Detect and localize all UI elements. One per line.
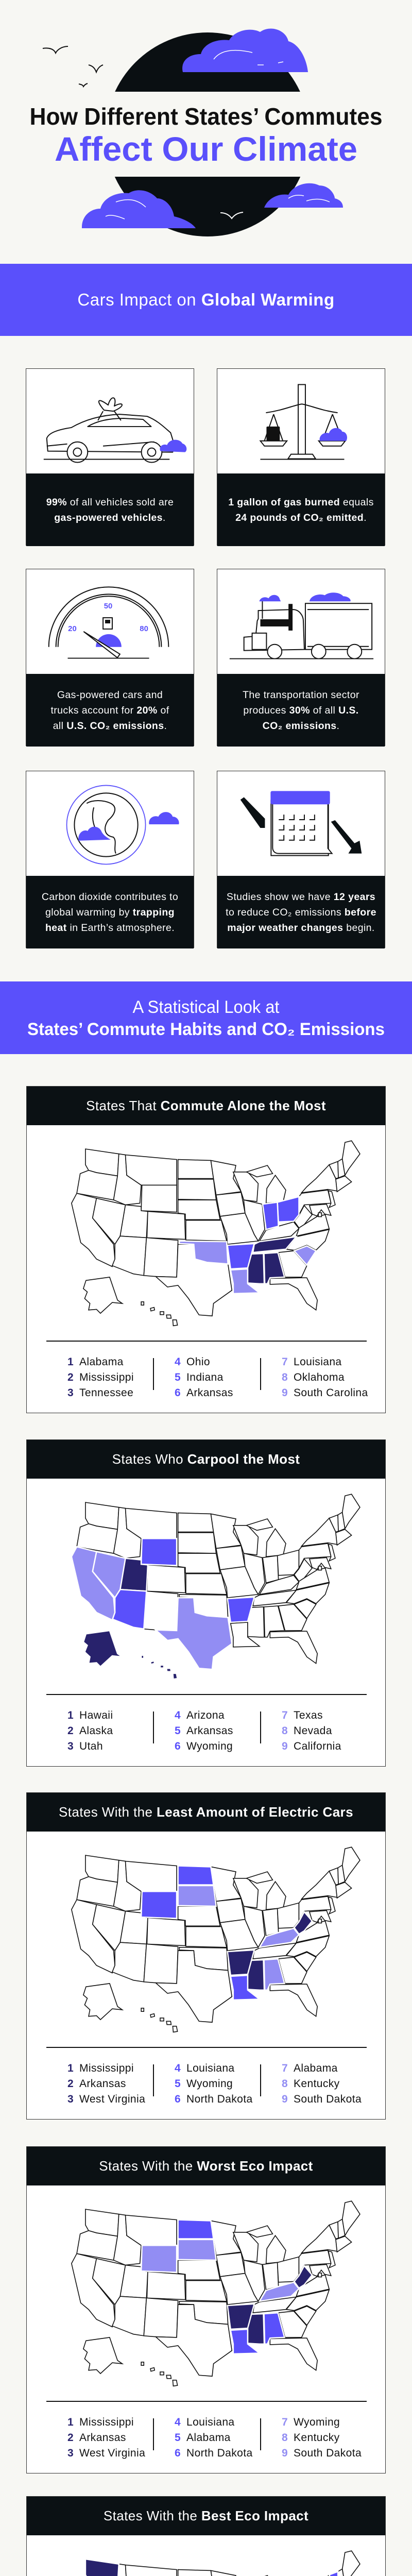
legend: Arkansas — [79, 2078, 126, 2090]
title: How Different States’ Commutes — [30, 103, 382, 130]
legend: South Carolina — [294, 1387, 368, 1399]
panel header — [27, 1087, 385, 1125]
banner: cars impact: Cars Impact on Global Warming — [77, 290, 335, 309]
legend: 7 — [282, 1709, 288, 1721]
legend: Arkansas — [186, 1387, 233, 1399]
legend: 2 — [67, 2078, 74, 2090]
card: carbon dioxide — [26, 771, 194, 948]
card: 1 gallon — [217, 368, 385, 546]
legend: 4 — [175, 2062, 181, 2074]
legend: Nevada — [294, 1725, 332, 1737]
legend: Oklahoma — [294, 1371, 345, 1383]
legend: 4 — [175, 2416, 181, 2428]
legend: West Virginia — [79, 2093, 145, 2105]
text: The transportation sector — [243, 689, 359, 701]
text: produces 30% of all U.S. — [243, 705, 359, 716]
text: Gas-powered cars and — [57, 689, 163, 701]
legend: 8 — [282, 2078, 288, 2090]
legend: South Dakota — [294, 2447, 362, 2459]
legend: North Dakota — [186, 2093, 253, 2105]
map — [71, 1846, 360, 2033]
legend: North Dakota — [186, 2447, 253, 2459]
text — [217, 674, 385, 747]
legend: Hawaii — [79, 1709, 113, 1721]
icon: speedometer — [48, 586, 169, 658]
legend: 8 — [282, 1725, 288, 1737]
legend: 3 — [67, 2447, 74, 2459]
legend: Wyoming — [294, 2416, 340, 2428]
legend: South Dakota — [294, 2093, 362, 2105]
legend: 9 — [282, 2093, 288, 2105]
legend: 8 — [282, 2432, 288, 2444]
legend — [67, 2416, 362, 2459]
legend: 9 — [282, 1740, 288, 1752]
panel: best eco — [26, 2496, 386, 2576]
legend: 4 — [175, 1709, 181, 1721]
text — [217, 473, 385, 546]
legend: 7 — [282, 1356, 288, 1368]
text: 1 gallon of gas burned equals — [228, 497, 374, 508]
legend: 1 — [67, 1709, 74, 1721]
legend: Mississippi — [79, 2062, 134, 2074]
map — [72, 1494, 360, 1679]
map — [71, 2200, 360, 2386]
legend: Louisiana — [186, 2062, 235, 2074]
legend: Wyoming — [186, 2078, 233, 2090]
legend: Ohio — [186, 1356, 210, 1368]
text: Carbon dioxide contributes to — [42, 891, 178, 903]
legend: Louisiana — [294, 1356, 342, 1368]
panel: carpool — [26, 1439, 386, 1767]
legend: Kentucky — [294, 2078, 340, 2090]
text: 99% of all vehicles sold are — [46, 497, 174, 508]
legend: 6 — [175, 1387, 181, 1399]
legend: Kentucky — [294, 2432, 340, 2444]
card: 99% vehicles — [26, 368, 194, 546]
text: global warming by trapping — [45, 907, 175, 918]
banner: statistical look: States’ Commute Habits and CO₂ Emissions — [27, 1020, 385, 1039]
panel header: States With the Least Amount of Electric Cars — [59, 1804, 353, 1820]
panel: commute alone — [26, 1086, 386, 1413]
legend: Alaska — [79, 1725, 113, 1737]
banner: cars impact — [0, 264, 412, 336]
header illustration — [30, 29, 382, 236]
text: Studies show we have 12 years — [227, 891, 375, 903]
legend: 6 — [175, 2093, 181, 2105]
legend: 3 — [67, 1387, 74, 1399]
panel: least electric — [26, 1792, 386, 2120]
legend: Alabama — [186, 2432, 231, 2444]
legend: 3 — [67, 1740, 74, 1752]
icon: truck — [230, 592, 374, 659]
legend: Wyoming — [186, 1740, 233, 1752]
panel header — [27, 1793, 385, 1832]
legend: Texas — [294, 1709, 323, 1721]
cloud: top right — [182, 29, 308, 72]
card: 30% — [217, 569, 385, 746]
legend — [67, 1356, 368, 1399]
panel header — [27, 2147, 385, 2185]
cloud: bottom right — [264, 183, 343, 208]
legend — [67, 2062, 362, 2105]
legend: 1 — [67, 2416, 74, 2428]
text — [26, 473, 194, 546]
legend: Indiana — [186, 1371, 224, 1383]
banner: statistical look: A Statistical Look at — [133, 997, 280, 1017]
legend: Mississippi — [79, 1371, 134, 1383]
header illustration: Affect Our Climate — [55, 130, 357, 168]
map — [86, 2550, 360, 2576]
cloud: bottom left — [82, 190, 196, 228]
panel header — [27, 1440, 385, 1479]
legend: 5 — [175, 1725, 181, 1737]
legend: Alabama — [294, 2062, 338, 2074]
birds — [43, 46, 103, 87]
panel header: States That Commute Alone the Most — [86, 1098, 326, 1113]
text: CO₂ emissions. — [263, 720, 339, 732]
panel header — [27, 2497, 385, 2535]
icon: speedometer: 80 — [140, 625, 148, 633]
icon: car with bow — [43, 397, 186, 463]
legend: Arizona — [186, 1709, 225, 1721]
legend: West Virginia — [79, 2447, 145, 2459]
legend: Tennessee — [79, 1387, 133, 1399]
legend: 1 — [67, 2062, 74, 2074]
legend: 9 — [282, 2447, 288, 2459]
legend: 2 — [67, 1371, 74, 1383]
legend: California — [294, 1740, 341, 1752]
icon: speedometer: 20 — [68, 625, 77, 633]
panel header: States Who Carpool the Most — [112, 1451, 300, 1467]
legend: Utah — [79, 1740, 103, 1752]
text: 24 pounds of CO₂ emitted. — [235, 512, 367, 523]
card: 12 years — [217, 771, 385, 948]
panel: worst eco — [26, 2146, 386, 2473]
text: gas-powered vehicles. — [54, 512, 166, 523]
text: to reduce CO₂ emissions before — [226, 907, 376, 918]
text — [217, 876, 385, 948]
legend: 1 — [67, 1356, 74, 1368]
text: major weather changes begin. — [227, 922, 375, 934]
legend: 7 — [282, 2416, 288, 2428]
text: trucks account for 20% of — [50, 705, 169, 716]
icon: speedometer: 50 — [104, 602, 112, 611]
legend: 4 — [175, 1356, 181, 1368]
legend: 6 — [175, 1740, 181, 1752]
icon: calendar with arrows — [240, 791, 362, 856]
icon: scale — [260, 384, 347, 460]
legend: 5 — [175, 2432, 181, 2444]
card: 20% — [26, 569, 194, 746]
legend: Arkansas — [186, 1725, 233, 1737]
banner: statistical look — [0, 981, 412, 1054]
panel header: States With the Worst Eco Impact — [99, 2158, 313, 2174]
legend: 3 — [67, 2093, 74, 2105]
text: all U.S. CO₂ emissions. — [53, 720, 167, 732]
legend: 6 — [175, 2447, 181, 2459]
legend: 9 — [282, 1387, 288, 1399]
icon: globe — [66, 785, 179, 865]
legend — [27, 2497, 386, 2576]
legend: 5 — [175, 2078, 181, 2090]
legend: 5 — [175, 1371, 181, 1383]
legend: 2 — [67, 2432, 74, 2444]
legend: Mississippi — [79, 2416, 134, 2428]
panel header: States With the Best Eco Impact — [104, 2508, 308, 2523]
text — [26, 674, 194, 747]
map — [71, 1140, 360, 1326]
text: heat in Earth’s atmosphere. — [45, 922, 175, 934]
legend — [67, 1709, 341, 1752]
legend: 7 — [282, 2062, 288, 2074]
legend: 8 — [282, 1371, 288, 1383]
legend: Louisiana — [186, 2416, 235, 2428]
legend: Arkansas — [79, 2432, 126, 2444]
legend: 2 — [67, 1725, 74, 1737]
text — [26, 876, 194, 948]
legend: Alabama — [79, 1356, 124, 1368]
